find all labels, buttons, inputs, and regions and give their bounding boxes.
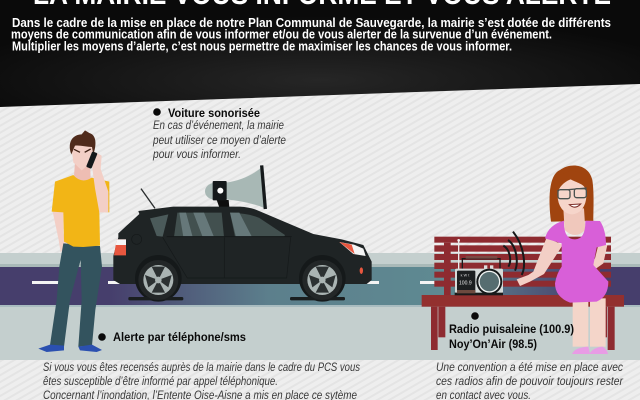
hair — [550, 166, 594, 222]
icon: radio with sound waves: kWt — [461, 274, 469, 278]
wheel arches and shadows — [135, 255, 182, 302]
text block: voiture sonorisee: peut utiliser ce moyen d’alerte — [152, 135, 286, 147]
text block: alerte par telephone — [43, 362, 360, 400]
header intro text: Multiplier les moyens d’alerte, c’est nous permettre de maximiser les chances de vous informer. — [12, 40, 512, 54]
text block: voiture sonorisee — [152, 120, 286, 161]
heading: radios: Noy’On’Air (98.5) — [449, 339, 537, 351]
red bench — [422, 237, 624, 350]
heading: radios — [449, 312, 574, 351]
panel: black header — [0, 0, 640, 107]
heading: radios: Radio puisaleine (100.9) — [449, 324, 574, 336]
woman sitting on the bench — [517, 166, 608, 354]
legs and shoes — [573, 298, 588, 347]
man on the phone — [38, 130, 109, 352]
street scene ground: curb, road, pavement — [0, 253, 640, 360]
rear wheel — [138, 260, 178, 300]
heading: voiture sonorisee: Voiture sonorisée — [168, 108, 260, 120]
heading: alerte par telephone: Alerte par téléphone/sms — [113, 332, 246, 344]
dress — [545, 221, 608, 303]
text block: radios: ces radios afin de pouvoir toujours rester — [436, 376, 624, 388]
antenna — [141, 189, 155, 208]
torso and head — [52, 130, 109, 247]
icon: radio with sound waves: 100.9 — [459, 280, 472, 286]
text block: alerte par telephone: êtes susceptible d’être informé par appel téléphonique. — [43, 376, 278, 388]
legs and shoes — [38, 212, 102, 352]
head light — [339, 242, 366, 256]
icon: radio with sound waves — [455, 232, 524, 295]
windows — [150, 214, 168, 237]
car body — [113, 207, 372, 284]
header intro text: moyens de communication afin de vous informer et/ou de vous alerter de la survenue d’un événement. — [11, 28, 552, 42]
arms — [517, 237, 563, 286]
tail light — [114, 239, 126, 255]
text block: voiture sonorisee: En cas d’événement, la mairie — [153, 120, 284, 132]
text block: alerte par telephone: Si vous vous êtes recensés auprès de la mairie dans le cadre du PCS vous — [43, 362, 360, 374]
icon: car with loudspeaker — [113, 165, 372, 302]
text block: radios — [436, 362, 624, 400]
front wheel — [302, 260, 342, 300]
header intro text — [11, 16, 611, 54]
header intro text: Dans le cadre de la mise en place de notre Plan Communal de Sauvegarde, la mairie s’est dotée de différents — [12, 16, 611, 30]
text block: voiture sonorisee: pour vous informer. — [152, 149, 241, 161]
loudspeaker — [205, 165, 265, 209]
